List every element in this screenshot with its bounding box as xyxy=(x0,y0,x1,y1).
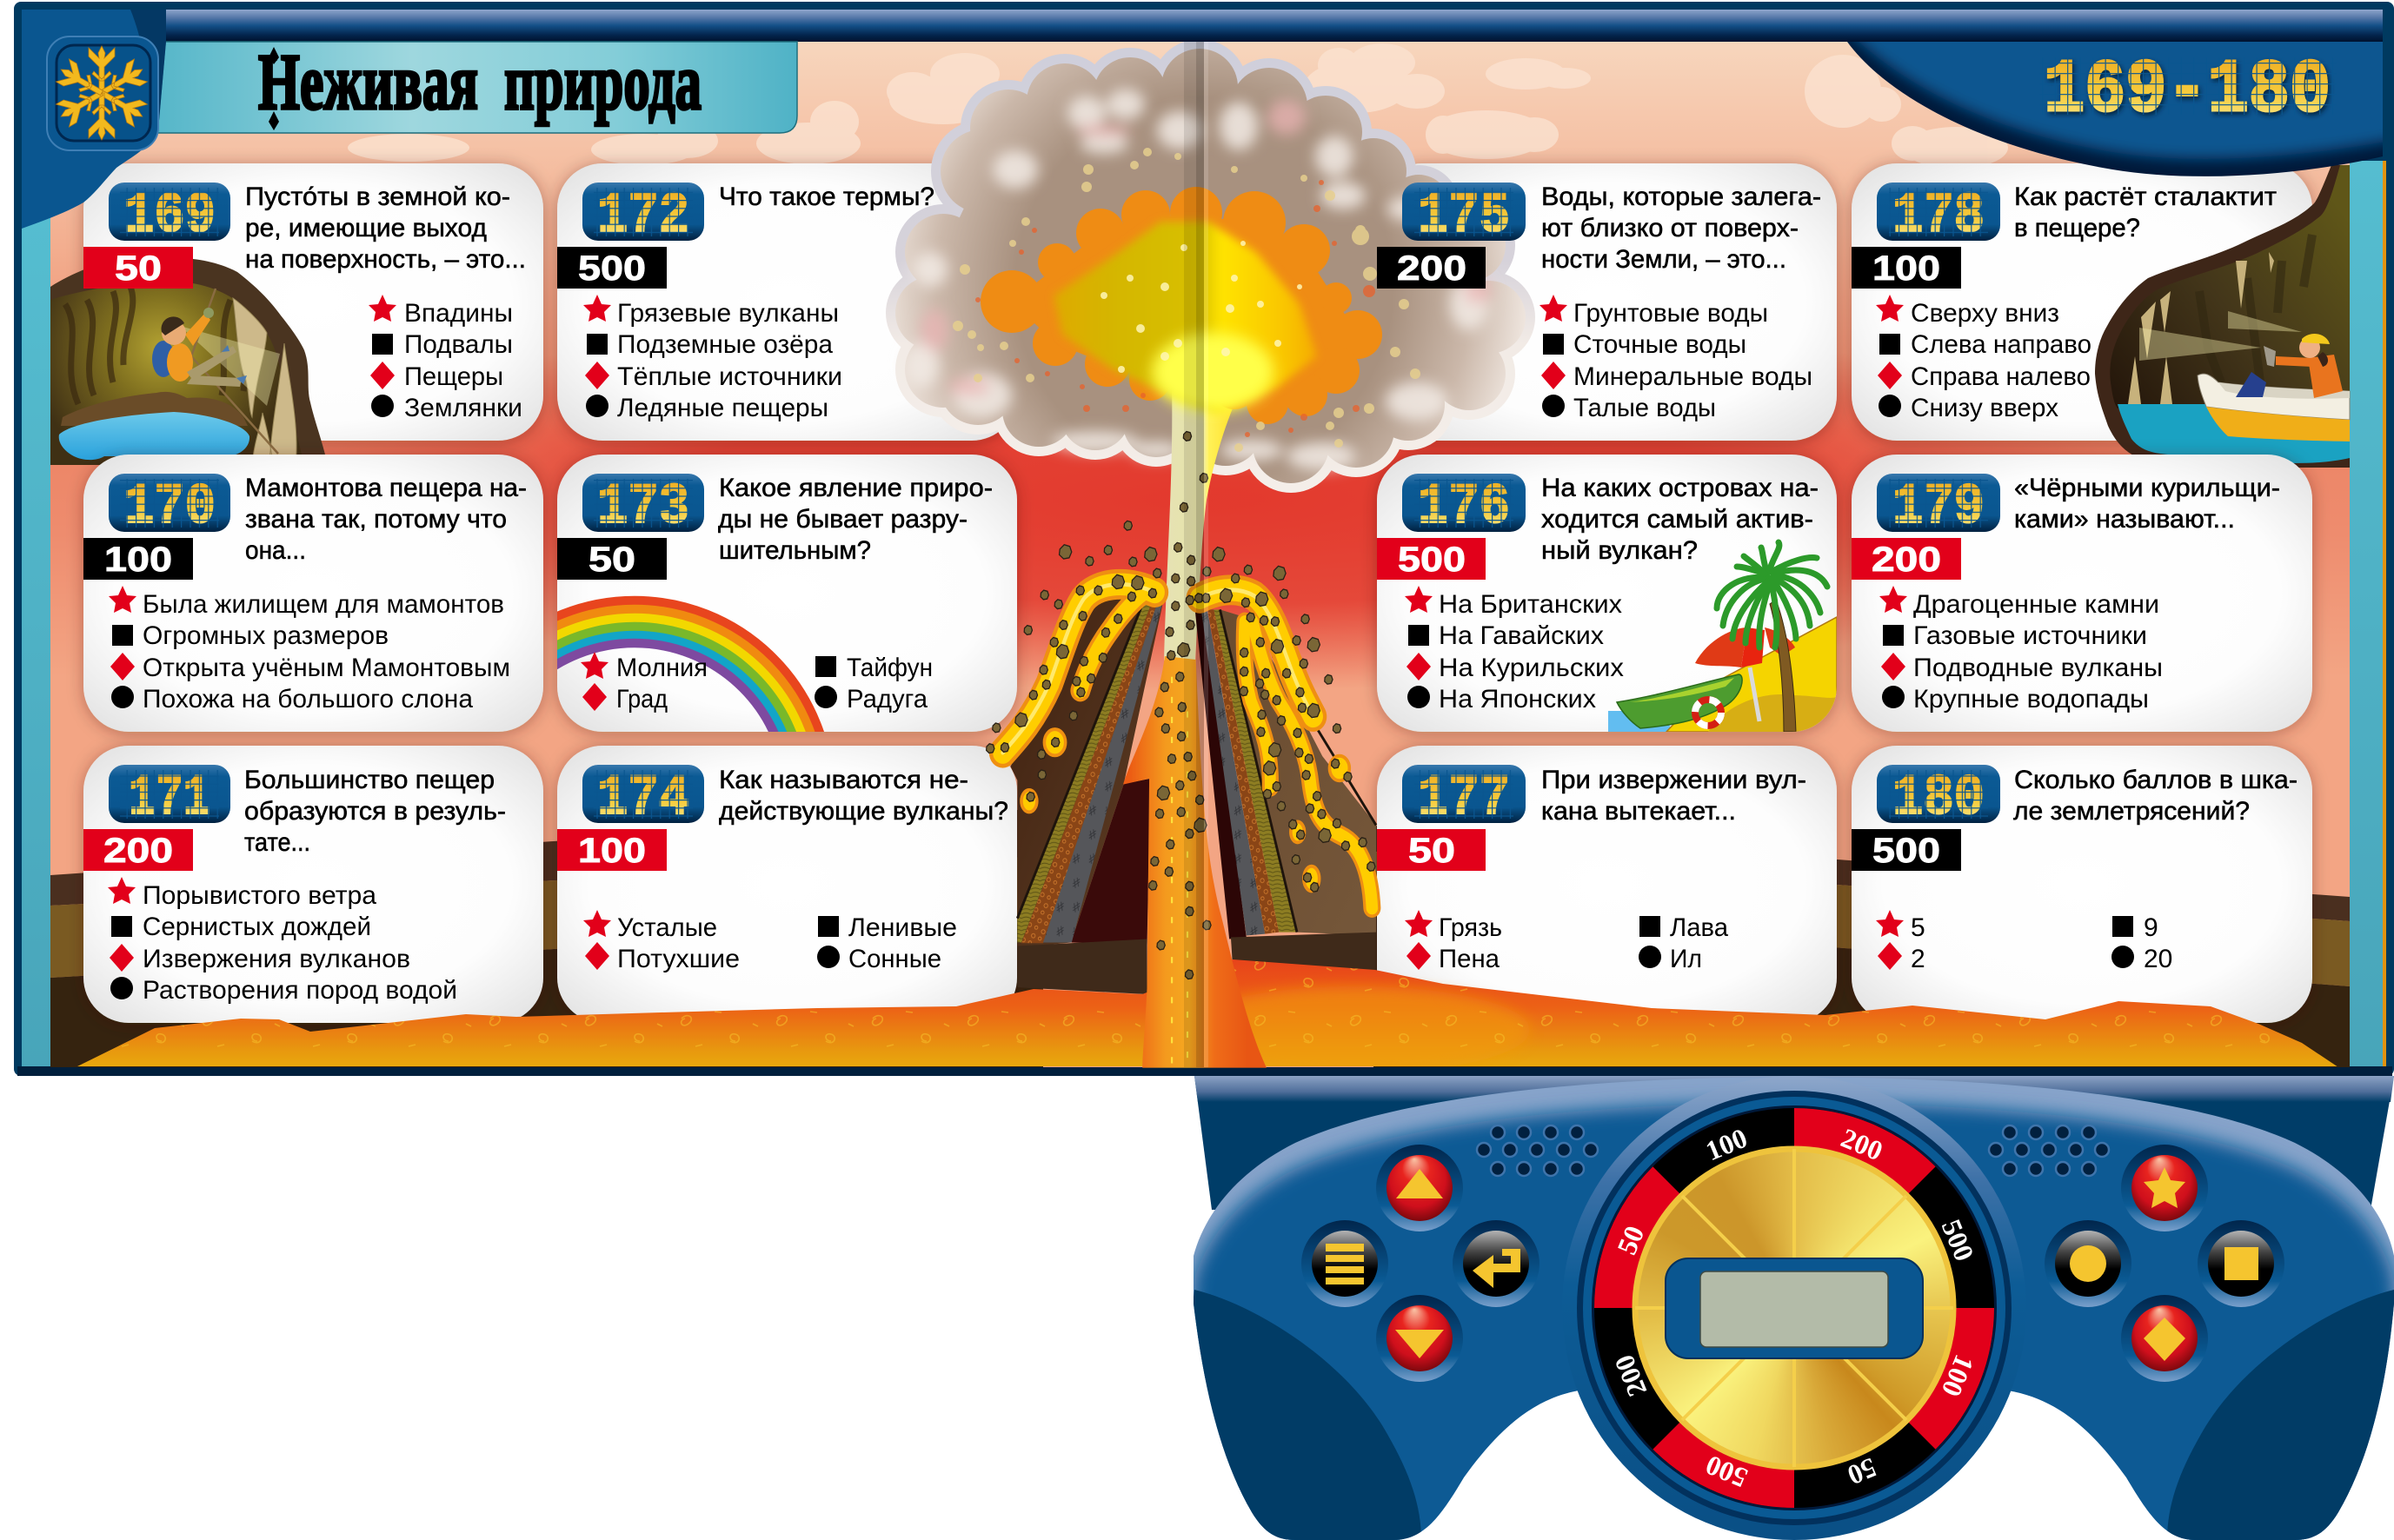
button: menu xyxy=(1301,1220,1388,1307)
range label: 169-180 xyxy=(2044,48,2331,133)
question text: ками» называют... xyxy=(2014,505,2235,534)
answer options: Радуга xyxy=(847,685,928,714)
answer options: На Японских xyxy=(1439,685,1596,714)
cloud halo xyxy=(895,49,1526,483)
illustration: boat in cave xyxy=(2095,165,2350,468)
question text: При извержении вул- xyxy=(1541,766,1806,794)
button: up arrow xyxy=(1376,1145,1463,1231)
left slope xyxy=(1010,591,1162,947)
card background: 170 xyxy=(83,455,543,732)
points tag 100 xyxy=(83,538,193,580)
cloud body xyxy=(895,49,1526,483)
number badge 176: 176 xyxy=(1418,475,1510,540)
right ground layers xyxy=(1373,826,2350,1067)
question text xyxy=(718,474,993,565)
question 176 xyxy=(1377,474,1819,714)
lava blobs xyxy=(1021,729,1349,891)
title text: Неживая xyxy=(258,37,478,126)
palm fronds xyxy=(1717,542,1827,647)
answer options xyxy=(583,910,957,973)
boat hull xyxy=(2198,374,2350,420)
corner shade xyxy=(130,10,166,148)
frame bottom shadow xyxy=(17,1066,2392,1076)
rescuer figure xyxy=(2264,334,2343,398)
number badge 169: 169 xyxy=(123,183,216,249)
points tag 100 xyxy=(1852,247,1961,289)
question text xyxy=(245,474,527,565)
question text: тате... xyxy=(244,828,310,857)
points tag 200 xyxy=(1852,538,1961,580)
top-right range panel xyxy=(1847,42,2383,176)
answer options xyxy=(583,295,842,422)
answer options: Потухшие xyxy=(617,945,740,973)
answer options xyxy=(1539,295,1812,422)
boat bag xyxy=(2236,372,2266,397)
card background: 179 xyxy=(1852,455,2312,732)
answer options: Справа налево xyxy=(1911,362,2091,391)
button: square xyxy=(2198,1220,2284,1307)
card background: 176 xyxy=(1377,455,1837,732)
card background: 172 xyxy=(557,163,1017,441)
number badge 174: 174 xyxy=(597,766,689,831)
question text: На каких островах на- xyxy=(1541,474,1819,502)
question text: Как растёт сталактит xyxy=(2014,183,2277,211)
pale ember dots xyxy=(953,148,1420,452)
console body xyxy=(1182,1077,2394,1540)
answer options xyxy=(1405,910,1728,973)
wheel score labels: 100 xyxy=(1701,1122,1752,1166)
cave wall streaks xyxy=(65,287,248,404)
question text xyxy=(1541,183,1821,274)
answer options: Пена xyxy=(1439,945,1500,973)
life ring xyxy=(1695,700,1721,726)
hanging stalactites xyxy=(2128,252,2274,404)
question 180 xyxy=(1852,765,2298,973)
question text: ходится самый актив- xyxy=(1541,505,1813,534)
points tag 500 xyxy=(1852,829,1961,871)
answer options: 2 xyxy=(1911,945,1925,973)
answer options: Усталые xyxy=(617,913,717,942)
lava flows xyxy=(1003,584,1372,908)
answer options: Ил xyxy=(1670,945,1702,973)
question text xyxy=(2014,474,2280,534)
tray highlight strip xyxy=(1194,1076,2394,1102)
answer options: Минеральные воды xyxy=(1573,362,1812,391)
dark strata lines xyxy=(1017,604,1376,933)
question text: образуются в резуль- xyxy=(244,797,506,826)
volcano cones xyxy=(1010,591,1376,994)
points tag 500 xyxy=(557,247,667,289)
answer options: Пещеры xyxy=(404,362,503,391)
wheel score labels xyxy=(1608,1122,1980,1494)
answer options: Грязь xyxy=(1439,913,1502,942)
points tag 500: 500 xyxy=(1872,832,1940,870)
answer options: Молния xyxy=(616,654,708,682)
question text: звана так, потому что xyxy=(245,505,507,534)
cave rock rim xyxy=(50,259,328,465)
card background: 174 xyxy=(557,746,1017,1023)
question 177 xyxy=(1377,765,1806,973)
book frame xyxy=(14,2,2394,1076)
answer options: Драгоценные камни xyxy=(1913,590,2159,619)
answer options: На Британских xyxy=(1439,590,1622,619)
orange ember speckles xyxy=(975,180,1375,437)
question text: Сколько баллов в шка- xyxy=(2014,766,2298,794)
red heat glow xyxy=(204,309,2204,691)
book centre fold xyxy=(1184,42,1208,1067)
answer options: Тёплые источники xyxy=(617,362,842,391)
question text xyxy=(1541,474,1819,565)
button: diamond xyxy=(2121,1295,2208,1382)
display screen xyxy=(1700,1271,1888,1347)
points tag 100: 100 xyxy=(578,832,646,870)
answer options: Была жилищем для мамонтов xyxy=(143,590,504,619)
points tag 200: 200 xyxy=(1397,249,1466,288)
title ornaments xyxy=(269,47,279,130)
answer options: 20 xyxy=(2144,945,2172,973)
points tag 50: 50 xyxy=(1408,832,1455,870)
left teal strip xyxy=(22,217,50,1066)
answer options xyxy=(1405,586,1624,714)
button: enter xyxy=(1453,1220,1539,1307)
panel body shading xyxy=(1825,0,2394,159)
question text: ности Земли, – это... xyxy=(1541,245,1786,274)
left ground layers xyxy=(50,808,1043,1067)
points tag 500 xyxy=(1377,538,1486,580)
question text xyxy=(244,766,506,857)
card background: 173 xyxy=(557,455,1017,732)
question 178 xyxy=(1852,183,2277,422)
answer options: Растворения пород водой xyxy=(143,976,457,1005)
question 172 xyxy=(557,183,934,422)
boat yellow stripe xyxy=(2206,407,2350,441)
boat interior xyxy=(2218,382,2350,399)
stalactites xyxy=(233,298,296,465)
lava curl texture xyxy=(122,961,2270,1046)
top bar xyxy=(166,10,2383,42)
answer options: 9 xyxy=(2144,913,2158,942)
fire hot spot xyxy=(1152,333,1273,411)
illustration: rainbow xyxy=(557,596,824,732)
sky clouds xyxy=(348,43,2008,169)
question text: Пусто́ты в земной ко- xyxy=(245,183,510,211)
wheel score labels: 500 xyxy=(1701,1450,1752,1494)
answer options: Сточные воды xyxy=(1573,330,1746,359)
question text: Как называются не- xyxy=(719,766,968,794)
flashlight beams xyxy=(2139,311,2302,361)
right speaker grille xyxy=(1989,1125,2109,1176)
explorer figure xyxy=(152,289,278,454)
gold disc xyxy=(1634,1148,1954,1468)
question text xyxy=(2013,766,2298,826)
number badge 177: 177 xyxy=(1418,766,1510,831)
question text: на поверхность, – это... xyxy=(245,245,526,274)
answer options xyxy=(369,295,522,422)
title text: природа xyxy=(504,37,702,126)
cave wall xyxy=(50,282,304,465)
cloud highlights xyxy=(904,89,1492,470)
card background: 178 xyxy=(1852,163,2312,441)
icon: snowflake xyxy=(55,46,149,140)
controller console below book xyxy=(1182,1076,2394,1540)
central lava column xyxy=(1123,656,1267,1068)
lava ground xyxy=(76,959,2338,1073)
answer options: Сонные xyxy=(848,945,941,973)
card background: 169 xyxy=(83,163,543,441)
flying rocks xyxy=(987,432,1375,979)
answer options: Подземные озёра xyxy=(617,330,833,359)
answer options: Снизу вверх xyxy=(1911,394,2058,422)
question text: Какое явление приро- xyxy=(719,474,993,502)
question 170 xyxy=(83,474,527,714)
answer options: Подводные вулканы xyxy=(1913,654,2163,682)
button: star xyxy=(2121,1145,2208,1231)
volcano ash cloud xyxy=(895,49,1526,660)
title banner xyxy=(155,37,797,133)
wheel score labels: 100 xyxy=(1936,1351,1980,1401)
answer options: Порывистого ветра xyxy=(143,881,376,910)
points tag 200 xyxy=(83,829,193,871)
button: down arrow xyxy=(1376,1295,1463,1382)
number badge 171: 171 xyxy=(129,766,210,831)
question 173 xyxy=(557,474,993,714)
cave rock rim xyxy=(2095,165,2350,468)
underground pool xyxy=(59,412,249,460)
question 174 xyxy=(557,765,1008,973)
answer options xyxy=(109,586,510,714)
points tag 200 xyxy=(1377,247,1486,289)
right olive strata xyxy=(1214,609,1296,933)
answer options: Град xyxy=(616,685,668,714)
answer options: Землянки xyxy=(404,394,522,422)
answer options: Похожа на большого слона xyxy=(143,685,473,714)
lava right glow xyxy=(1240,979,1528,1041)
number badge 178: 178 xyxy=(1892,183,1985,249)
fire ball yellow core xyxy=(1054,222,1317,413)
answer options: Ленивые xyxy=(848,913,957,942)
question text xyxy=(1541,766,1806,826)
question text: ют близко от поверх- xyxy=(1541,214,1799,242)
question text: ре, имеющие выход xyxy=(245,214,487,242)
button: circle xyxy=(2045,1220,2131,1307)
question 175 xyxy=(1377,183,1821,422)
fire ball outer orange xyxy=(981,187,1382,424)
yellow lava dashes xyxy=(1172,677,1187,1066)
palm trunk xyxy=(1770,600,1796,732)
answer options xyxy=(1876,910,2172,973)
cave water xyxy=(2118,404,2350,463)
beach umbrella xyxy=(1695,627,1795,721)
question text: Что такое термы? xyxy=(719,183,934,211)
question text: Большинство пещер xyxy=(244,766,495,794)
top-left corner panel xyxy=(22,10,166,229)
left olive strata xyxy=(1017,602,1152,942)
answer options: На Гавайских xyxy=(1439,621,1604,650)
answer options: Талые воды xyxy=(1573,394,1716,422)
card background: 177 xyxy=(1377,746,1837,1023)
left speaker grille xyxy=(1477,1125,1598,1176)
answer options xyxy=(581,652,933,714)
question 171 xyxy=(83,765,506,1005)
volcano lava and rocks xyxy=(987,432,1375,1068)
illustration: palm beach xyxy=(1608,542,1837,732)
points tag 50: 50 xyxy=(115,249,162,288)
headlamp beam xyxy=(180,326,280,406)
boat interior xyxy=(1630,678,1734,702)
card background: 171 xyxy=(83,746,543,1023)
wheel score labels: 200 xyxy=(1608,1351,1653,1401)
sky background xyxy=(50,42,2350,1067)
card background: 180 xyxy=(1852,746,2312,1023)
question 169 xyxy=(83,183,526,422)
points tag 50 xyxy=(557,538,667,580)
green rowing boat xyxy=(1617,674,1742,728)
number badge 175: 175 xyxy=(1418,183,1510,249)
answer options: Открыта учёным Мамонтовым xyxy=(143,654,510,682)
sand shadow xyxy=(1708,694,1837,732)
answer options xyxy=(1876,295,2091,422)
answer options: Извержения вулканов xyxy=(143,945,410,973)
question text: шительным? xyxy=(719,536,871,565)
left cave shadow xyxy=(1071,779,1150,944)
right rust strata xyxy=(1207,609,1279,934)
question text: Мамонтова пещера на- xyxy=(245,474,527,502)
disc spokes and rim xyxy=(1635,1149,1953,1467)
cave interior xyxy=(2110,165,2350,408)
wheel score labels: 500 xyxy=(1936,1215,1980,1265)
number badge 172: 172 xyxy=(597,183,689,249)
question text: в пещере? xyxy=(2014,214,2140,242)
question text: ле землетрясений? xyxy=(2013,797,2250,826)
question text: ды не бывает разру- xyxy=(718,505,968,534)
answer options: На Курильских xyxy=(1439,654,1624,682)
question text: «Чёрными курильщи- xyxy=(2014,474,2280,502)
right orange edge xyxy=(2383,161,2386,1066)
answer options: Подвалы xyxy=(404,330,513,359)
left grey strata xyxy=(1043,602,1162,942)
right slope xyxy=(1220,609,1376,936)
points tag 50: 50 xyxy=(589,541,635,579)
cave pillars xyxy=(2199,235,2312,382)
wheel score labels: 50 xyxy=(1843,1452,1881,1491)
answer options: Ледяные пещеры xyxy=(617,394,828,422)
points tag 100: 100 xyxy=(1872,249,1940,288)
number badge 179: 179 xyxy=(1892,475,1985,540)
rock ledge xyxy=(61,392,248,426)
number badge 170: 170 xyxy=(123,475,216,540)
points tag 200: 200 xyxy=(103,832,173,870)
question text: действующие вулканы? xyxy=(719,797,1008,826)
console back tray xyxy=(1194,1076,2394,1210)
points tag 200: 200 xyxy=(1872,541,1941,579)
wheel score labels: 200 xyxy=(1837,1122,1887,1166)
points tag 500: 500 xyxy=(1398,541,1466,579)
answer options: Лава xyxy=(1670,913,1728,942)
right inner shadow xyxy=(1195,611,1247,939)
display bezel xyxy=(1666,1258,1923,1358)
answer options: Огромных размеров xyxy=(143,621,389,650)
answer options: Грунтовые воды xyxy=(1573,299,1768,328)
right grey strata xyxy=(1201,611,1265,936)
answer options: Впадины xyxy=(404,299,513,328)
question text: ный вулкан? xyxy=(1541,536,1698,565)
question text xyxy=(2014,183,2277,242)
sea xyxy=(1608,711,1673,732)
left rust strata xyxy=(1021,602,1157,943)
points tag 100 xyxy=(557,829,667,871)
answer options xyxy=(108,877,457,1005)
illustration: cave explorer xyxy=(50,259,328,465)
question text: кана вытекает... xyxy=(1541,797,1736,826)
question text xyxy=(719,766,1008,826)
question text: Воды, которые залега- xyxy=(1541,183,1821,211)
question text: она... xyxy=(245,536,306,565)
sand hill xyxy=(1666,617,1837,732)
answer options: Сернистых дождей xyxy=(143,913,371,941)
answer options: Тайфун xyxy=(847,654,933,682)
fire sparks xyxy=(1101,241,1302,373)
answer options: 5 xyxy=(1911,913,1925,942)
card background: 175 xyxy=(1377,163,1837,441)
question 179 xyxy=(1852,474,2280,714)
answer options: Крупные водопады xyxy=(1913,685,2149,714)
answer options: Грязевые вулканы xyxy=(617,299,839,328)
snowflake button xyxy=(47,37,158,150)
answer options: Газовые источники xyxy=(1913,621,2147,650)
number badge 180: 180 xyxy=(1892,766,1985,831)
answer options: Слева направо xyxy=(1911,330,2091,359)
number badge 173: 173 xyxy=(597,475,689,540)
points tag 100: 100 xyxy=(104,541,172,579)
left dark base xyxy=(1017,939,1147,994)
right teal strip xyxy=(2350,161,2383,1066)
score wheel xyxy=(1562,1076,2026,1540)
question text xyxy=(245,183,526,274)
points tag 50 xyxy=(1377,829,1486,871)
answer options: Сверху вниз xyxy=(1911,299,2059,328)
answer options xyxy=(1879,586,2163,714)
points tag 500: 500 xyxy=(578,249,646,288)
wheel score labels: 50 xyxy=(1611,1221,1650,1259)
points tag 50 xyxy=(83,247,193,289)
right dark base xyxy=(1231,933,1376,973)
lava stream xyxy=(1164,382,1241,660)
